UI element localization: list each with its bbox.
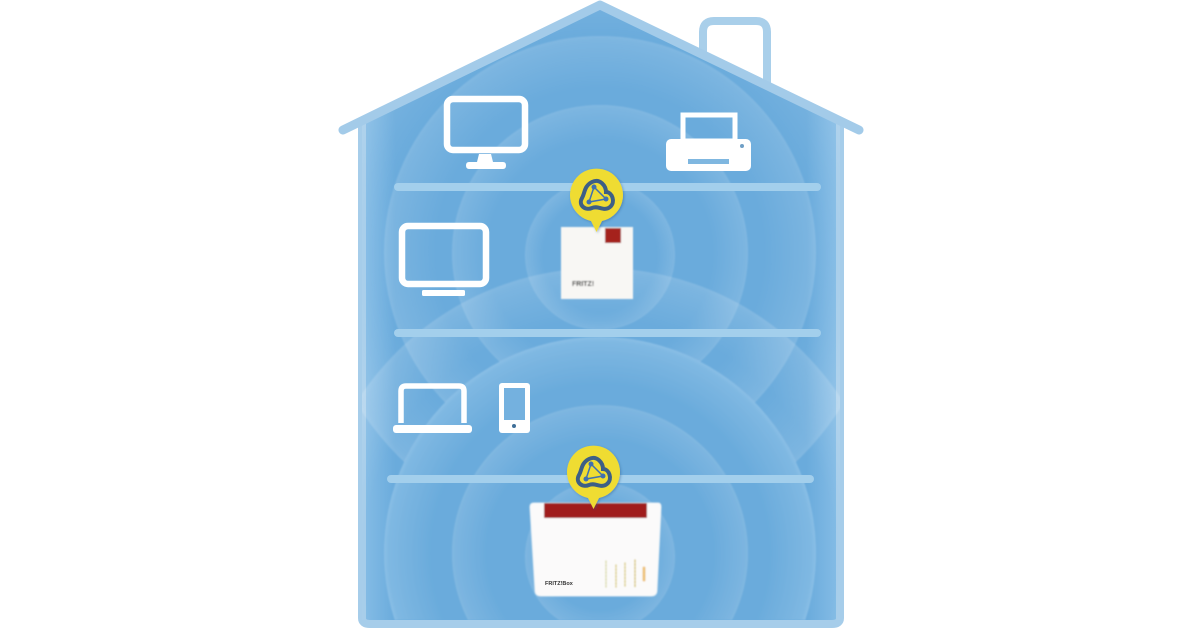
repeater red panel <box>605 228 621 243</box>
rings: lower router <box>362 270 840 620</box>
device: upper mesh repeater <box>561 227 633 299</box>
floor shelf 3 <box>387 475 814 483</box>
icon: smartphone <box>499 383 530 433</box>
router status lights <box>606 560 644 587</box>
house body <box>362 5 840 624</box>
walls <box>362 122 840 624</box>
router brand: FRITZ!Box <box>545 581 574 587</box>
floor shelf 1 <box>394 183 821 191</box>
rings: upper repeater <box>362 36 840 462</box>
mesh symbol <box>581 181 613 209</box>
wifi signal rings <box>362 36 840 620</box>
chimney <box>703 21 767 84</box>
pin: lower mesh badge <box>567 446 620 509</box>
icon: laptop <box>393 386 472 433</box>
infographic: house with mesh wifi coverage <box>338 0 864 628</box>
roof <box>343 5 859 130</box>
device: lower router <box>530 503 661 596</box>
pin: upper mesh badge <box>570 169 623 232</box>
icon: television <box>402 226 486 296</box>
router red bar <box>544 503 647 518</box>
repeater brand: FRITZ! <box>572 281 594 288</box>
icon: desktop monitor <box>447 99 525 169</box>
icon: printer <box>666 115 751 171</box>
mesh symbol <box>578 458 610 486</box>
floor shelf 2 <box>394 329 821 337</box>
